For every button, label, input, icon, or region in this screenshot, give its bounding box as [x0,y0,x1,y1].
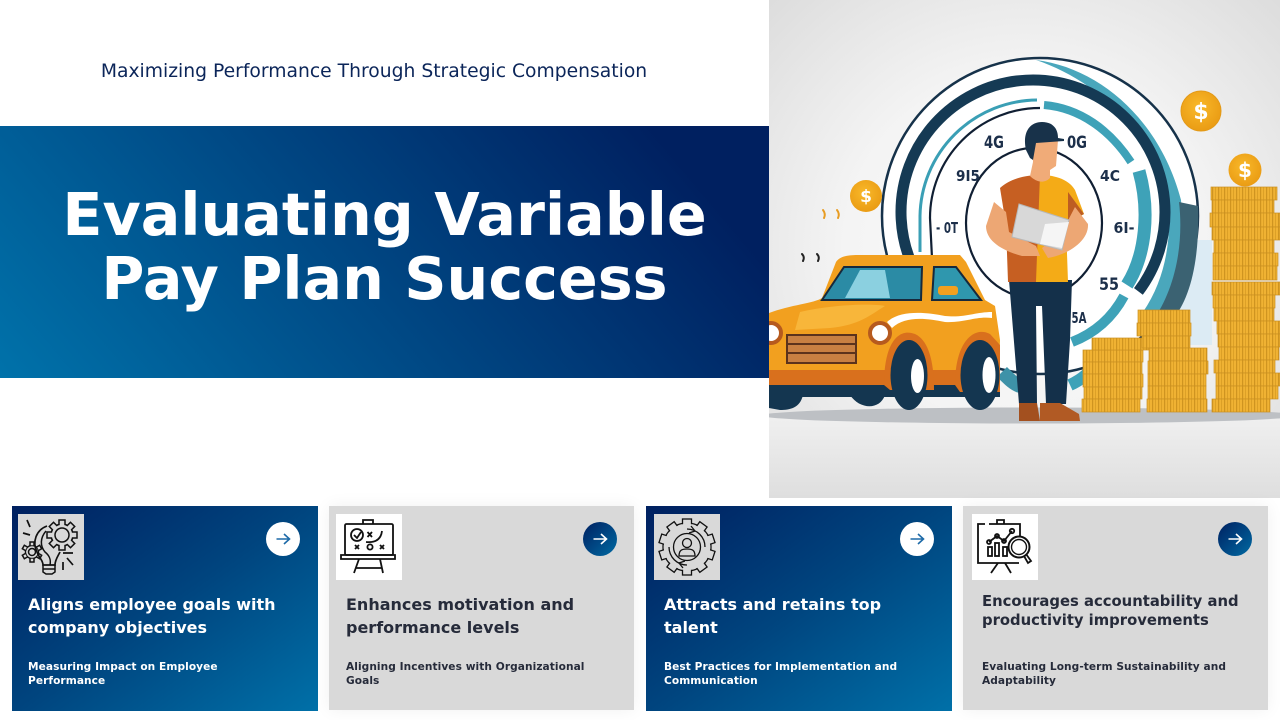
card 1 [12,506,318,711]
arrow button [1218,522,1252,556]
title: Pay Plan Success [101,245,668,313]
gauge numbers: 4C [1100,167,1120,185]
arrow button [900,522,934,556]
gauge numbers: 9I5 [956,167,980,185]
subtitle: Maximizing Performance Through Strategic Compensation [101,61,647,82]
arrow button [266,522,300,556]
dollar coins: $ [1193,100,1209,125]
card 2 [329,506,634,710]
gauge numbers: 5A [1072,309,1087,327]
icon: analytics board [972,514,1038,580]
gauge numbers: 4G [984,133,1004,153]
card heading: Encourages accountability and productivity improvements [982,593,1239,629]
card heading: Enhances motivation and performance levels [346,595,574,637]
card heading: Aligns employee goals with company objectives [28,595,276,637]
coin stacks [1082,187,1280,412]
title banner [0,126,769,378]
dollar coins [850,91,1262,212]
ground shadow [762,408,1280,424]
gauge numbers: 6I- [1114,219,1134,237]
icon: gear with person [654,514,720,580]
dollar coins: $ [1238,158,1252,182]
card subtext: Evaluating Long-term Sustainability and Adaptability [982,660,1226,686]
arrow button [583,522,617,556]
car [761,255,1000,410]
card subtext: Best Practices for Implementation and Communication [664,660,897,686]
gauge numbers: - 0T [936,219,959,237]
card heading: Attracts and retains top talent [664,595,881,637]
person [986,122,1088,421]
gauge dial [847,26,1219,398]
card subtext: Measuring Impact on Employee Performance [28,660,218,686]
title: Evaluating Variable [62,181,707,249]
illustration: person, car, gauge and coins [769,0,1280,498]
title [62,181,707,313]
card 3 [646,506,952,711]
gauge numbers: 0G [1067,133,1087,153]
motion marks [802,210,839,261]
gauge numbers: 55 [1099,275,1119,295]
dollar coins: $ [860,187,872,207]
icon: gear light bulb [18,514,84,580]
card subtext: Aligning Incentives with Organizational Goals [346,660,584,686]
icon: strategy board [336,514,402,580]
gauge numbers [936,133,1134,327]
card 4 [963,506,1268,710]
